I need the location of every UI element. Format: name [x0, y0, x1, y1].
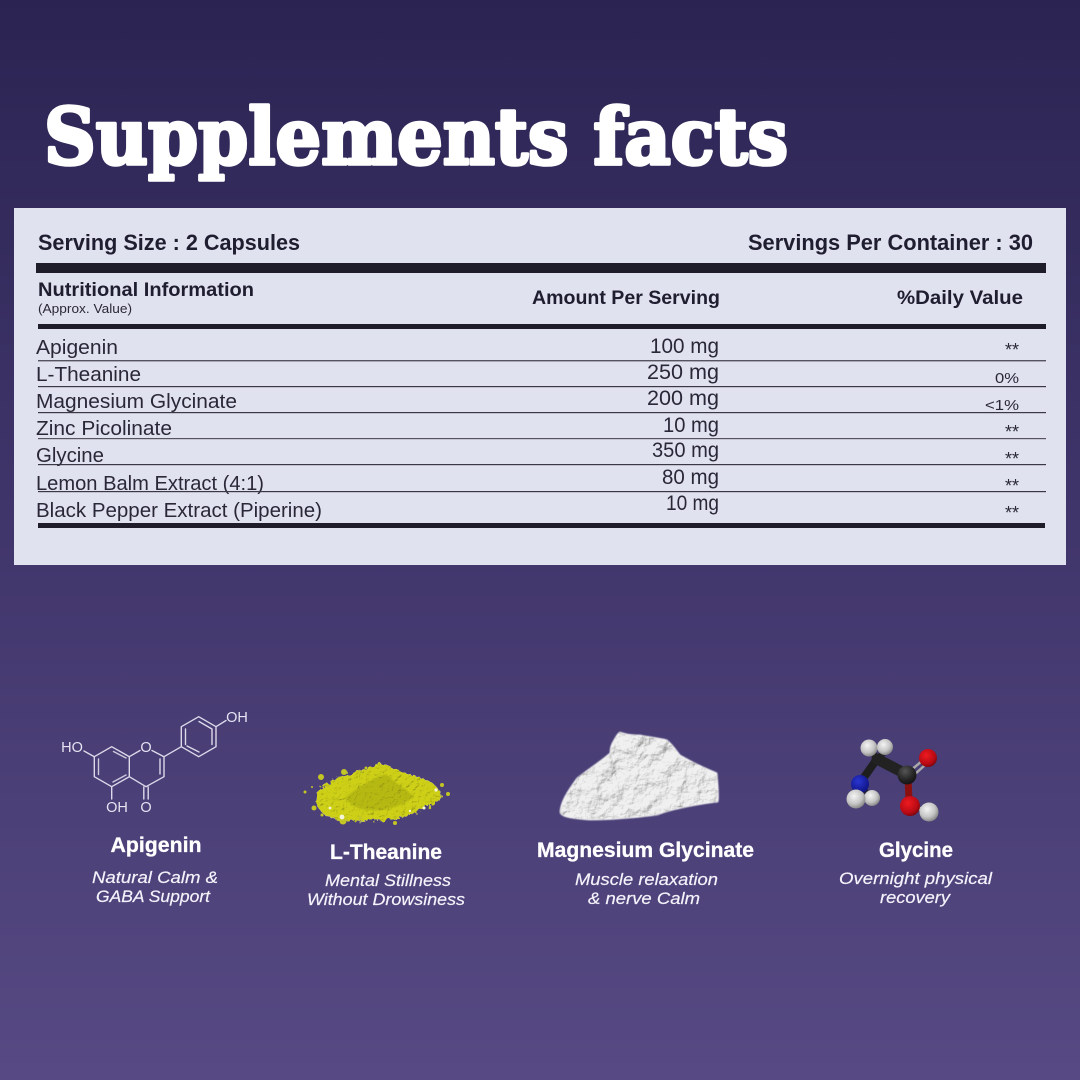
column heading: nutritional information: (Approx. Value)	[38, 301, 132, 316]
row: magnesium glycinate: Magnesium Glycinate	[36, 391, 237, 413]
row: glycine: 350 mg	[652, 439, 719, 462]
ingredient: l-theanine: Without Drowsiness	[307, 890, 466, 909]
ingredient: l-theanine: L-Theanine	[330, 841, 442, 864]
row: magnesium glycinate: 200 mg	[647, 387, 719, 410]
row: black pepper extract: Black Pepper Extract (Piperine)	[36, 500, 322, 522]
ingredient: magnesium glycinate	[537, 839, 754, 908]
row: l-theanine: 250 mg	[647, 361, 719, 384]
row: zinc picolinate: 10 mg	[663, 414, 719, 437]
row: apigenin: Apigenin	[36, 337, 118, 359]
row: lemon balm extract: 80 mg	[662, 466, 719, 489]
ingredient: l-theanine	[307, 841, 466, 909]
row: magnesium glycinate	[36, 387, 1019, 414]
row: magnesium glycinate: <1%	[985, 397, 1019, 414]
row: l-theanine	[36, 361, 1019, 387]
row: l-theanine: 0%	[995, 370, 1019, 387]
row: black pepper extract: **	[1005, 503, 1019, 523]
row: lemon balm extract: **	[1005, 476, 1019, 496]
icon: apigenin molecule: OH	[106, 800, 128, 816]
row: zinc picolinate: Zinc Picolinate	[36, 418, 172, 440]
icon: apigenin molecule: O	[140, 740, 152, 756]
column heading: nutritional information	[38, 279, 254, 316]
column heading: amount per serving: Amount Per Serving	[532, 287, 720, 309]
title: Supplements facts	[44, 92, 788, 183]
row: glycine: **	[1005, 449, 1019, 469]
ingredient: l-theanine: Mental Stillness	[325, 871, 452, 890]
row: zinc picolinate	[36, 414, 1019, 442]
ingredient: apigenin: GABA Support	[96, 887, 211, 906]
row: apigenin: 100 mg	[650, 335, 719, 358]
ingredient: magnesium glycinate: Muscle relaxation	[575, 870, 718, 889]
ingredient: glycine: Overnight physical	[839, 869, 993, 888]
icon: glycine ball-and-stick model	[846, 739, 938, 822]
row: l-theanine: L-Theanine	[36, 364, 141, 386]
ingredient: glycine	[839, 839, 993, 907]
column heading: nutritional information: Nutritional Information	[38, 279, 254, 301]
row: black pepper extract	[36, 492, 1019, 523]
column heading: daily value: %Daily Value	[897, 287, 1023, 309]
icon: apigenin molecule: O	[140, 800, 152, 816]
ingredient: glycine: recovery	[880, 888, 952, 907]
ingredient: glycine: Glycine	[879, 839, 953, 862]
row: apigenin: **	[1005, 340, 1019, 360]
row: black pepper extract: 10 mg	[666, 492, 719, 515]
row: lemon balm extract	[36, 466, 1019, 496]
panel: supplement facts table	[14, 208, 1066, 565]
row: glycine: Glycine	[36, 445, 104, 467]
serving size: Serving Size : 2 Capsules	[38, 230, 300, 255]
icon: apigenin molecule	[61, 710, 248, 816]
ingredient: apigenin: Apigenin	[110, 834, 202, 857]
row: zinc picolinate: **	[1005, 422, 1019, 442]
row: apigenin	[36, 335, 1019, 360]
ingredient: magnesium glycinate: & nerve Calm	[588, 889, 700, 908]
ingredient: apigenin	[92, 834, 218, 906]
servings per container: Servings Per Container : 30	[748, 230, 1033, 255]
row: glycine	[36, 439, 1019, 469]
icon: magnesium glycinate white powder	[560, 732, 718, 820]
ingredient: apigenin: Natural Calm &	[92, 868, 218, 887]
icon: apigenin molecule: OH	[226, 710, 248, 726]
row: lemon balm extract: Lemon Balm Extract (4:1)	[36, 473, 264, 495]
icon: apigenin molecule: HO	[61, 740, 83, 756]
ingredient: magnesium glycinate: Magnesium Glycinate	[537, 839, 754, 862]
icon: l-theanine yellow powder	[304, 763, 450, 825]
